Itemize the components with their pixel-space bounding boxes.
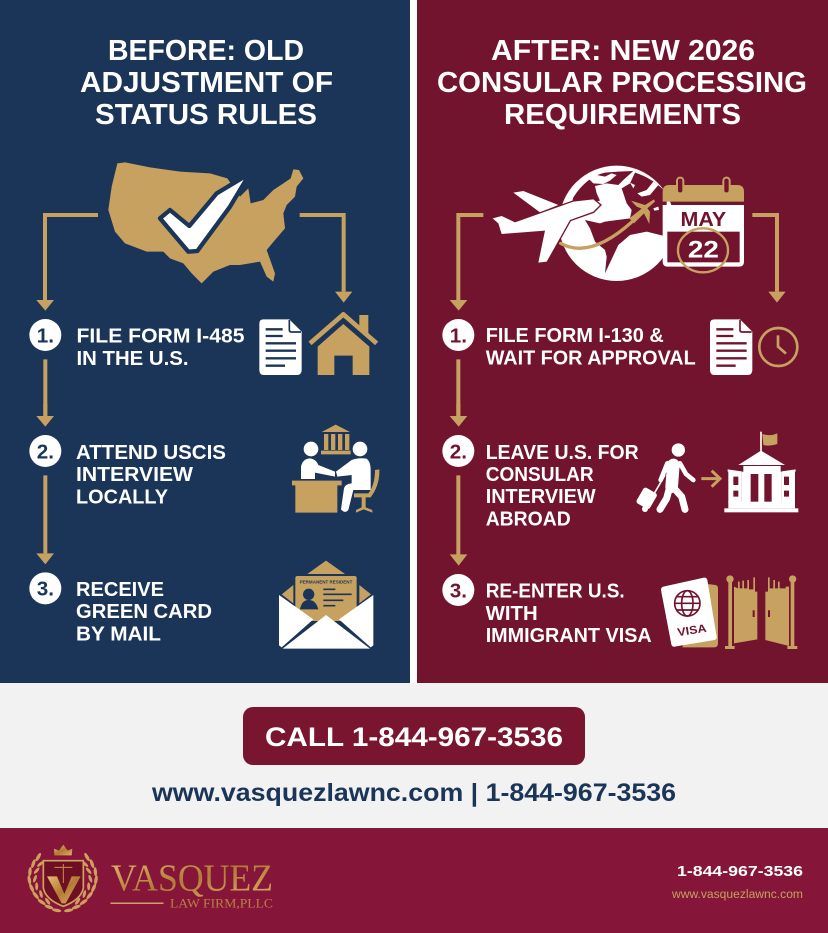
step 2 text: LEAVE U.S. FOR bbox=[486, 442, 639, 464]
step 3 number bbox=[442, 574, 474, 606]
icon: document bbox=[710, 319, 752, 375]
step 3 text: RE-ENTER U.S. bbox=[486, 581, 625, 603]
step 1 number: 1. bbox=[37, 324, 54, 347]
step 2 text: LOCALLY bbox=[76, 486, 169, 508]
icon: interview at desk bbox=[292, 425, 379, 513]
heading: before: BEFORE: OLD bbox=[108, 35, 304, 67]
footer bbox=[0, 828, 828, 933]
step 1 number: 1. bbox=[450, 324, 467, 347]
button: call: CALL 1-844-967-3536 bbox=[265, 722, 563, 752]
icon: arrow to embassy bbox=[701, 471, 720, 487]
step 1 number bbox=[29, 319, 61, 351]
footer phone: 1-844-967-3536 bbox=[677, 863, 803, 880]
button: call bbox=[243, 707, 585, 765]
icon: clock bbox=[759, 328, 797, 366]
icon: envelope with green card: PERMANENT RESIDENT bbox=[300, 580, 353, 585]
icon: open gates bbox=[725, 575, 797, 649]
heading: before: ADJUSTMENT OF bbox=[80, 67, 333, 99]
arrow: calendar to clock bbox=[752, 215, 786, 303]
step 1 text bbox=[76, 326, 244, 370]
icon: embassy with flag bbox=[724, 432, 798, 512]
step 1 text: WAIT FOR APPROVAL bbox=[486, 347, 696, 369]
arrow: step 2 to step 3 bbox=[450, 475, 467, 566]
step 3 text: GREEN CARD bbox=[76, 601, 212, 623]
icon: envelope with green card bbox=[279, 561, 373, 649]
icon: US map with check mark bbox=[108, 162, 303, 283]
step 2 text bbox=[76, 442, 226, 508]
icon: calendar May 22 bbox=[663, 178, 744, 272]
logo: wordmark: VASQUEZ bbox=[111, 858, 273, 900]
step 3 text: RECEIVE bbox=[76, 579, 164, 601]
step 2 text: INTERVIEW bbox=[76, 464, 193, 486]
icon: house bbox=[310, 314, 377, 375]
panel: before bbox=[0, 0, 410, 683]
footer website: www.vasquezlawnc.com bbox=[671, 889, 803, 901]
step 3 text: WITH bbox=[486, 603, 538, 625]
step 1 text: IN THE U.S. bbox=[76, 348, 188, 370]
icon: traveler with suitcase bbox=[636, 443, 693, 512]
arrow head: step 2 bbox=[36, 403, 54, 427]
step 3 text bbox=[486, 581, 652, 647]
step 3 number: 3. bbox=[450, 579, 467, 602]
logo: crest bbox=[27, 845, 98, 913]
step 2 number: 2. bbox=[450, 440, 467, 463]
arrow head: step 2 bbox=[450, 403, 467, 427]
contact line: www.vasquezlawnc.com | 1-844-967-3536 bbox=[151, 779, 676, 807]
icon: passport visa: VISA bbox=[677, 623, 707, 639]
step 3 number: 3. bbox=[37, 578, 54, 601]
step 1 text bbox=[486, 325, 696, 369]
step 2 number bbox=[29, 435, 61, 467]
icon: document bbox=[259, 319, 302, 375]
step 3 text bbox=[76, 579, 212, 646]
step 1 text: FILE FORM I-485 bbox=[76, 326, 244, 348]
step 2 text: CONSULAR bbox=[486, 464, 594, 486]
arrow: step 1 to step 2 bbox=[39, 359, 51, 417]
logo: wordmark: LAW FIRM,PLLC bbox=[170, 896, 273, 910]
step 2 text: ABROAD bbox=[486, 509, 571, 531]
arrow: globe to step 1 bbox=[450, 215, 483, 311]
panel: call to action bbox=[0, 683, 828, 828]
step 3 number bbox=[29, 572, 61, 604]
step 1 number bbox=[442, 319, 474, 351]
step 3 text: IMMIGRANT VISA bbox=[486, 625, 652, 647]
step 1 text: FILE FORM I-130 & bbox=[486, 325, 664, 347]
arrow: step 2 to step 3 bbox=[36, 475, 54, 564]
heading: after: REQUIREMENTS bbox=[504, 99, 741, 131]
heading: before bbox=[80, 35, 333, 131]
arrow: step 1 to step 2 bbox=[452, 359, 464, 417]
step 2 text: INTERVIEW bbox=[486, 486, 596, 508]
icon: globe with planes bbox=[493, 166, 674, 281]
step 2 number: 2. bbox=[37, 440, 54, 463]
arrow: map to step 1 bbox=[36, 215, 98, 311]
icon: calendar May 22: MAY bbox=[680, 209, 726, 231]
icon: passport visa bbox=[661, 578, 718, 647]
heading: after: CONSULAR PROCESSING bbox=[437, 67, 807, 99]
step 2 number bbox=[442, 435, 474, 467]
step 3 text: BY MAIL bbox=[76, 624, 161, 646]
heading: before: STATUS RULES bbox=[95, 99, 317, 131]
arrow: map to house bbox=[300, 215, 352, 303]
step 2 text: ATTEND USCIS bbox=[76, 442, 226, 464]
heading: after bbox=[437, 35, 807, 131]
panel: after bbox=[417, 0, 828, 683]
icon: calendar May 22: 22 bbox=[688, 236, 719, 263]
step 2 text bbox=[486, 442, 639, 531]
heading: after: AFTER: NEW 2026 bbox=[491, 35, 755, 67]
